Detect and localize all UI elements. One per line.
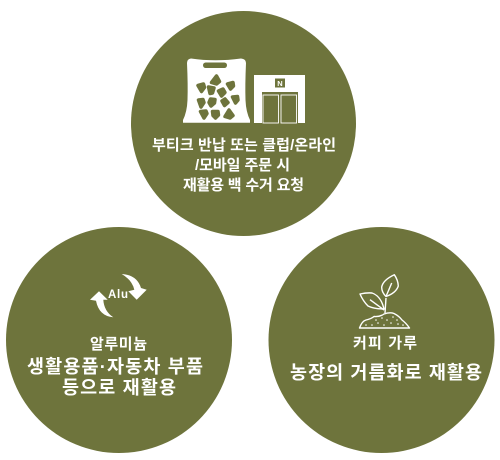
icon: recycling arrows xyxy=(90,274,147,317)
panel: coffee grounds xyxy=(268,227,494,453)
text: boutique return: 부티크 반납 또는 클럽/온라인 xyxy=(152,137,336,154)
text: coffee grounds reuse: 농장의 거름화로 재활용 xyxy=(290,362,482,383)
icon: sprout xyxy=(360,275,410,328)
icon: boutique store xyxy=(254,75,305,123)
panel: aluminium xyxy=(6,227,232,453)
text: boutique return xyxy=(152,137,336,194)
icon: boutique store: N xyxy=(277,79,283,88)
icon: capsule recycling bag xyxy=(183,58,250,123)
text: boutique return: 재활용 백 수거 요청 xyxy=(183,177,304,194)
text: boutique return: /모바일 주문 시 xyxy=(195,157,290,174)
text: aluminium reuse xyxy=(27,356,203,398)
text: aluminium label: 알루미늄 xyxy=(90,336,147,353)
text: aluminium reuse: 생활용품·자동차 부품 xyxy=(27,356,203,377)
text: coffee grounds label: 커피 가루 xyxy=(353,335,417,352)
icon: recycling arrows: Alu xyxy=(108,289,128,301)
text: aluminium reuse: 등으로 재활용 xyxy=(62,377,176,398)
panel: boutique return xyxy=(131,11,356,236)
